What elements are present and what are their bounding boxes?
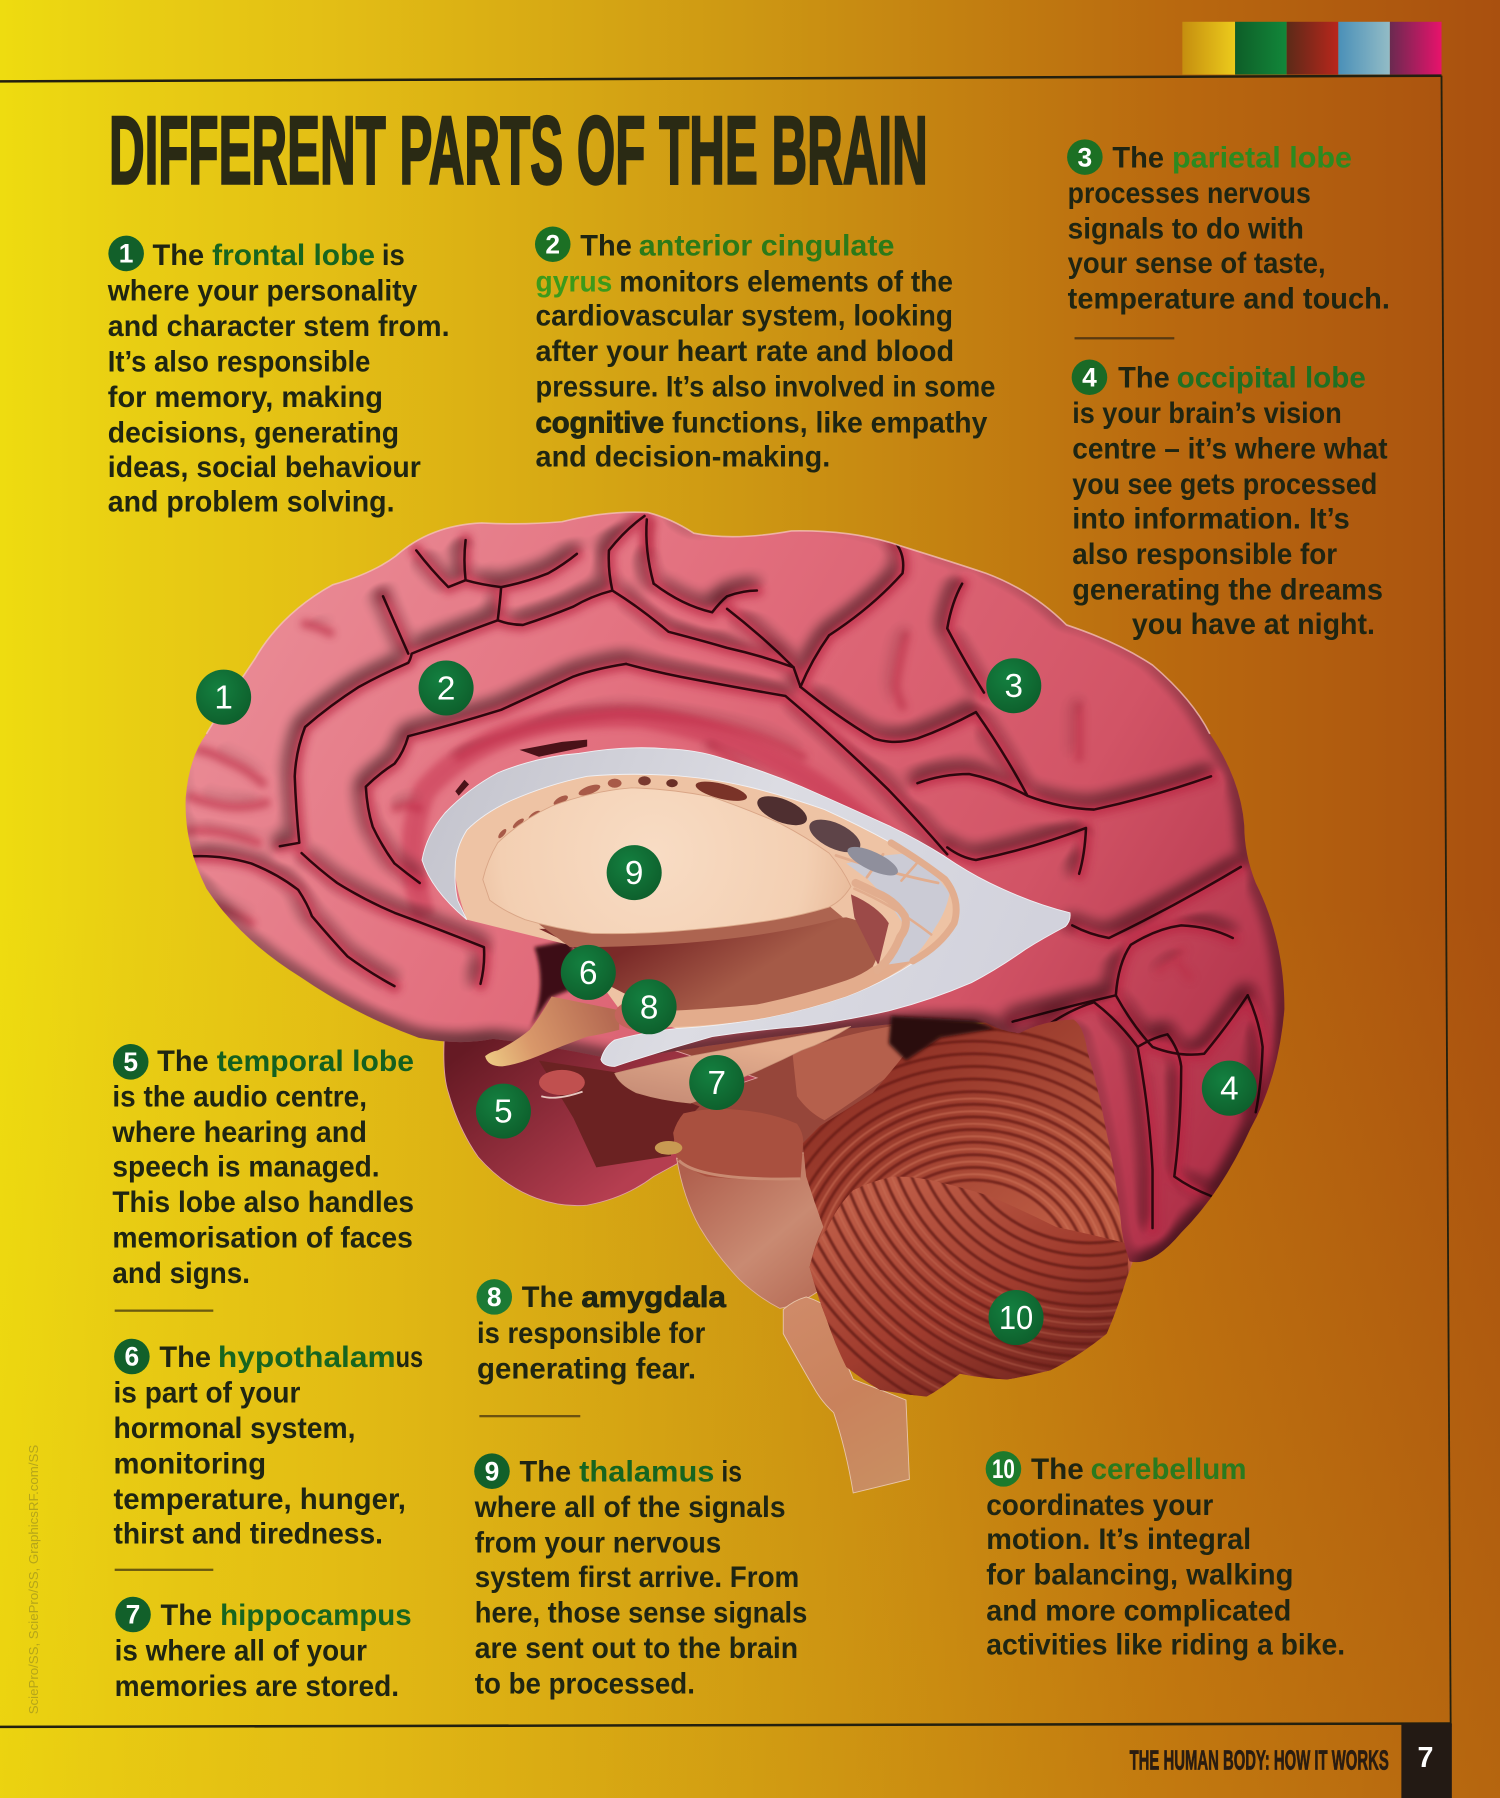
- badge 10: [986, 1451, 1021, 1487]
- text block 3: parietal lobe: parietal lobe: [1172, 142, 1352, 174]
- text block 7: hippocampus: is where all of your: [115, 1635, 367, 1667]
- text block 5: temporal lobe: speech is managed.: [112, 1151, 380, 1183]
- text block 10: cerebellum: coordinates your: [986, 1490, 1213, 1522]
- pons seam highlight: [679, 1160, 800, 1179]
- text block 8: amygdala: The: [522, 1282, 573, 1314]
- badge 5: [113, 1044, 149, 1080]
- badge on brain 8: 8: [640, 989, 658, 1026]
- midbrain block under strip: [792, 1026, 917, 1120]
- badge on brain 10: 10: [999, 1300, 1033, 1337]
- text block 10: cerebellum: for balancing, walking: [986, 1560, 1294, 1592]
- text block 4: occipital lobe: occipital lobe: [1177, 363, 1366, 395]
- badge 9: [474, 1453, 510, 1489]
- midbrain under thalamus: [539, 917, 882, 1015]
- badge 2: 2: [545, 229, 560, 259]
- text block 9: thalamus: to be processed.: [475, 1669, 695, 1701]
- text block 4: occipital lobe: [1072, 359, 1388, 641]
- text block 10: cerebellum: and more complicated: [986, 1595, 1291, 1627]
- badge 6: [114, 1339, 150, 1374]
- text block 10: cerebellum: cerebellum: [1091, 1454, 1247, 1486]
- text block 2: anterior cingulate gyrus: functions, like empathy: [672, 407, 988, 439]
- text block 10: cerebellum: [986, 1451, 1345, 1662]
- text block 9: thalamus: thalamus: [579, 1457, 714, 1489]
- badge on brain 7: [689, 1055, 744, 1110]
- temporal inner dark recess: [539, 1061, 700, 1167]
- badge 1: [108, 236, 144, 271]
- text block 2: anterior cingulate gyrus: anterior cingulate: [639, 231, 894, 263]
- badge on brain 1: 1: [214, 680, 233, 717]
- central backing behind structures: [573, 1009, 929, 1193]
- badge on brain 7: 7: [707, 1065, 726, 1102]
- text block 9: thalamus: where all of the signals: [474, 1492, 786, 1524]
- text block 4: occipital lobe: generating the dreams: [1072, 575, 1383, 607]
- text block 6: hypothalamus: monitoring: [114, 1448, 266, 1480]
- hypothalamus stem: [485, 996, 619, 1066]
- text block 2: anterior cingulate gyrus: and decision-making.: [536, 442, 830, 474]
- badge 1: 1: [119, 239, 133, 269]
- brain illustration: [186, 511, 1284, 1494]
- badge 4: 4: [1082, 362, 1097, 392]
- badge on brain 4: [1202, 1061, 1257, 1116]
- text block 3: parietal lobe: temperature and touch.: [1068, 283, 1390, 315]
- corpus callosum crescent: [422, 748, 1070, 1066]
- numbered badges on brain: [196, 658, 1257, 1345]
- fornix strands: [836, 843, 956, 970]
- badge 5: 5: [123, 1047, 138, 1077]
- small nerve bump: [655, 1141, 682, 1155]
- text block 2: anterior cingulate gyrus: after your heart rate and blood: [536, 336, 954, 368]
- text block 5: temporal lobe: [111, 1044, 414, 1290]
- cerebrum: [186, 512, 1284, 1262]
- pons bulb: [673, 1109, 803, 1180]
- text block 1: frontal lobe: frontal lobe: [212, 240, 375, 272]
- text block 2: anterior cingulate gyrus: cognitive: [536, 407, 664, 439]
- badge on brain 3: 3: [1005, 668, 1023, 705]
- text block 8: amygdala: amygdala: [581, 1282, 727, 1314]
- ventricle openings: [497, 776, 902, 881]
- colour tab bar: [1182, 22, 1442, 75]
- amygdala tip: [615, 999, 670, 1031]
- medulla and spinal cord: [783, 1297, 909, 1493]
- text block 8: amygdala: generating fear.: [477, 1353, 696, 1385]
- badge on brain 3: [986, 658, 1041, 713]
- text block 6: hypothalamus: hypothalam: [218, 1342, 396, 1374]
- text block 2: anterior cingulate gyrus: [535, 226, 995, 474]
- text block 4: occipital lobe: centre – it’s where what: [1072, 434, 1388, 466]
- text block 6: hypothalamus: us: [396, 1342, 423, 1374]
- badge on brain 5: [476, 1084, 531, 1139]
- cerebellum lower lobe: [810, 1176, 1128, 1396]
- badge on brain 6: 6: [579, 955, 598, 992]
- text block 6: hypothalamus: temperature, hunger,: [114, 1484, 406, 1516]
- cerebrum edge highlight: [206, 512, 1210, 734]
- page number box: [1401, 1723, 1452, 1798]
- text block 4: occipital lobe: also responsible for: [1072, 539, 1337, 571]
- text block 6: hypothalamus: [114, 1339, 423, 1550]
- text block 9: thalamus: is: [721, 1457, 742, 1489]
- text block 7: hippocampus: The: [161, 1600, 212, 1632]
- text block 5: temporal lobe: where hearing and: [111, 1117, 367, 1149]
- cerebellum upper: [803, 1019, 1133, 1396]
- badge 10: 10: [992, 1454, 1015, 1484]
- badge on brain 2: 2: [437, 670, 455, 707]
- text block 3: parietal lobe: your sense of taste,: [1068, 248, 1326, 280]
- temporal lobe underside: [444, 1026, 757, 1206]
- lower brainstem body: [677, 1152, 843, 1308]
- interior peach base: [455, 774, 958, 1029]
- text block 4: occipital lobe: is your brain’s vision: [1072, 398, 1342, 430]
- dark callosal marks: [455, 740, 587, 796]
- grey window in fornix: [846, 853, 950, 970]
- badge 4: [1072, 359, 1107, 395]
- text block 1: frontal lobe: is: [382, 240, 405, 272]
- text block 4: occipital lobe: you have at night.: [1132, 609, 1375, 641]
- badge on brain 10: [989, 1290, 1044, 1345]
- text block 4: occipital lobe: you see gets processed: [1072, 469, 1377, 501]
- badge 3: 3: [1078, 142, 1092, 172]
- text block 2: anterior cingulate gyrus: gyrus: [536, 266, 612, 298]
- text block 7: hippocampus: memories are stored.: [115, 1671, 399, 1703]
- badge 2: [535, 226, 571, 262]
- text block 2: anterior cingulate gyrus: cardiovascular system, looking: [536, 301, 953, 333]
- text block 3: parietal lobe: [1067, 139, 1390, 315]
- badge on brain 4: 4: [1220, 1071, 1239, 1108]
- small red bump: [539, 1070, 585, 1098]
- text block 6: hypothalamus: thirst and tiredness.: [114, 1518, 383, 1550]
- text block 2: anterior cingulate gyrus: The: [580, 231, 632, 263]
- text block 9: thalamus: here, those sense signals: [475, 1598, 807, 1630]
- text block 5: temporal lobe: is the audio centre,: [112, 1082, 367, 1114]
- badge 6: 6: [125, 1342, 139, 1372]
- text block 5: temporal lobe: and signs.: [112, 1258, 250, 1290]
- text block 1: frontal lobe: decisions, generating: [108, 418, 399, 450]
- text block 1: frontal lobe: ideas, social behaviour: [108, 452, 421, 484]
- badge on brain 5: 5: [494, 1094, 513, 1131]
- text block 1: frontal lobe: for memory, making: [108, 382, 383, 414]
- text block 5: temporal lobe: This lobe also handles: [112, 1187, 414, 1219]
- text block 7: hippocampus: hippocampus: [220, 1600, 412, 1632]
- text block 5: temporal lobe: temporal lobe: [217, 1046, 414, 1078]
- text block 4: occipital lobe: into information. It’s: [1072, 504, 1350, 536]
- badge 8: 8: [487, 1282, 502, 1312]
- text block 3: parietal lobe: signals to do with: [1068, 214, 1304, 246]
- dark notch above cerebellum: [889, 1016, 995, 1061]
- badge 3: [1067, 139, 1103, 175]
- text block 6: hypothalamus: hormonal system,: [114, 1413, 356, 1445]
- text block 10: cerebellum: motion. It’s integral: [986, 1524, 1251, 1556]
- text block 9: thalamus: system first arrive. From: [475, 1562, 799, 1594]
- badge 7: [115, 1597, 151, 1632]
- text block 5: temporal lobe: The: [157, 1046, 209, 1078]
- badge 7: 7: [126, 1600, 140, 1630]
- text block 9: thalamus: from your nervous: [475, 1528, 721, 1560]
- text block 7: hippocampus: [115, 1597, 412, 1703]
- text block 10: cerebellum: activities like riding a bike.: [986, 1630, 1345, 1662]
- text block 9: thalamus: [474, 1453, 807, 1701]
- thalamus: [483, 788, 851, 934]
- text block 1: frontal lobe: The: [153, 240, 204, 272]
- text block 1: frontal lobe: and problem solving.: [108, 486, 394, 518]
- text block 6: hypothalamus: is part of your: [114, 1377, 300, 1409]
- text block 3: parietal lobe: processes nervous: [1068, 178, 1311, 210]
- text block 3: parietal lobe: The: [1112, 142, 1164, 174]
- badge on brain 2: [419, 660, 474, 716]
- badge on brain 9: 9: [625, 855, 643, 892]
- page number box: 7: [1417, 1742, 1433, 1774]
- text block 1: frontal lobe: and character stem from.: [108, 311, 450, 343]
- fissure shadow: [530, 940, 579, 1030]
- reddish slab beneath thalamus: [539, 906, 843, 947]
- text block 1: frontal lobe: It’s also responsible: [108, 347, 370, 379]
- text block 9: thalamus: The: [519, 1457, 571, 1489]
- text block 8: amygdala: is responsible for: [477, 1318, 705, 1350]
- fornix lower band: [659, 961, 913, 1027]
- badge on brain 1: [196, 670, 251, 725]
- text block 10: cerebellum: The: [1031, 1454, 1084, 1486]
- text block 2: anterior cingulate gyrus: monitors elements of the: [619, 266, 953, 298]
- text block 1: frontal lobe: where your personality: [107, 275, 418, 307]
- badge 8: [476, 1279, 512, 1315]
- pink side piece: [851, 894, 889, 966]
- text block 9: thalamus: are sent out to the brain: [475, 1633, 798, 1665]
- badge on brain 6: [561, 945, 616, 1000]
- text block 4: occipital lobe: The: [1118, 363, 1170, 395]
- text block 2: anterior cingulate gyrus: pressure. It’s also involved in some: [536, 372, 995, 404]
- badge on brain 8: [622, 979, 677, 1034]
- text block 1: frontal lobe: [107, 236, 450, 518]
- text block 6: hypothalamus: The: [159, 1342, 211, 1374]
- badge on brain 9: [607, 845, 662, 900]
- text block 8: amygdala: [476, 1279, 727, 1385]
- text block 5: temporal lobe: memorisation of faces: [112, 1223, 413, 1255]
- badge 9: 9: [485, 1456, 499, 1486]
- image credit: SciePro/SS, SciePro/SS, GraphicsRF.com/SS: [26, 1445, 41, 1714]
- hippocampus: [615, 1026, 851, 1103]
